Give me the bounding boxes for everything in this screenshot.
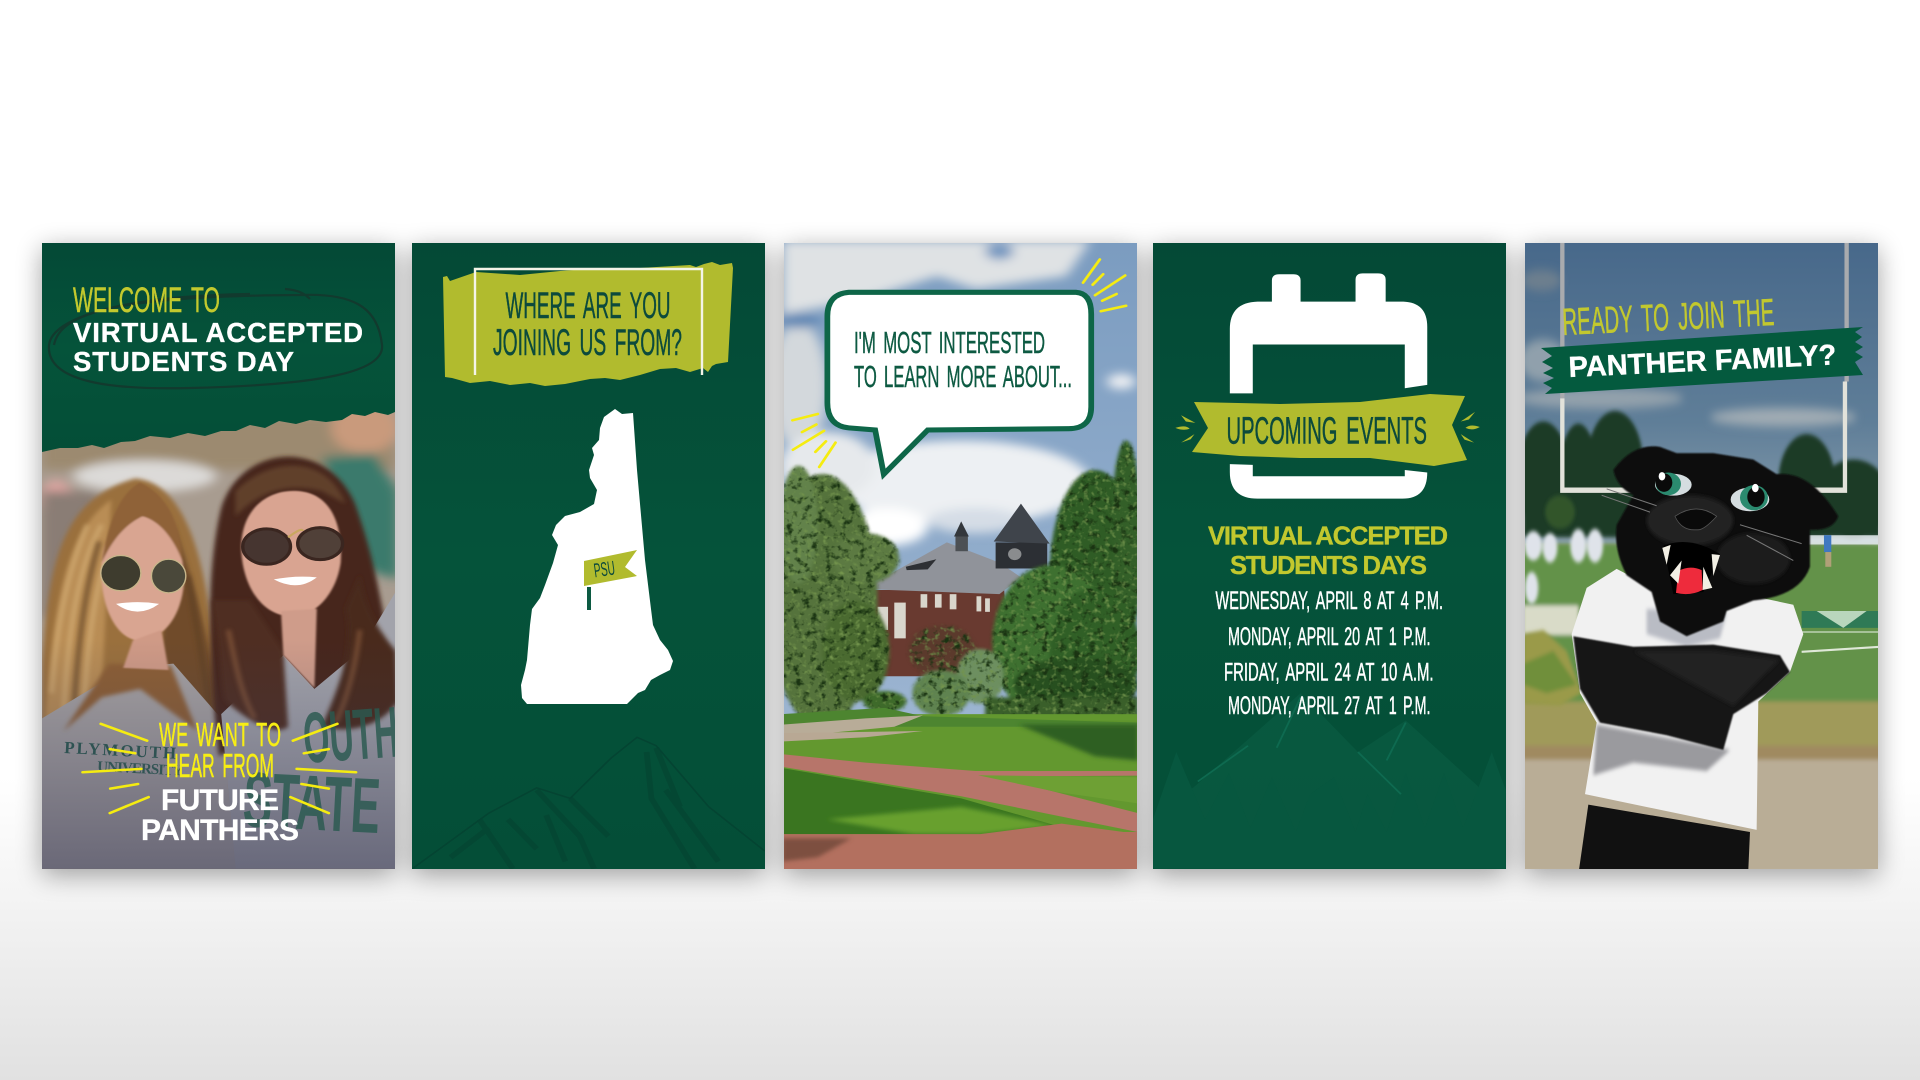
panel: panther family <box>1517 241 1890 873</box>
callout line: hear from: HEAR FROM <box>166 747 274 784</box>
event: april 24: FRIDAY, APRIL 24 AT 10 A.M. <box>1224 658 1434 686</box>
photo: campus <box>784 243 1137 714</box>
banner <box>443 262 733 386</box>
callout: we want to hear from: WE WANT TO <box>159 716 281 753</box>
players <box>1525 529 1603 604</box>
panel: where are you joining from <box>412 243 765 869</box>
callout: future: FUTURE <box>161 784 279 817</box>
panel: welcome story <box>40 243 401 869</box>
whiskers <box>1602 489 1802 560</box>
tree line <box>1517 411 1890 542</box>
event: april 8: WEDNESDAY, APRIL 8 AT 4 P.M. <box>1216 587 1443 615</box>
photo: mascot on football field <box>1517 241 1890 873</box>
heading: students day: STUDENTS DAY <box>73 346 294 377</box>
shrubs <box>1523 630 1582 706</box>
calendar icon <box>1230 273 1427 499</box>
banner: upcoming events: UPCOMING EVENTS <box>1226 410 1427 452</box>
callout: panthers: PANTHERS <box>141 814 299 847</box>
trees <box>768 440 1140 727</box>
banner: panther family: PANTHER FAMILY? <box>1568 339 1837 384</box>
map: New Hampshire <box>521 409 673 704</box>
left student <box>42 478 236 869</box>
lawns and brick paths <box>782 708 1138 870</box>
torn green header <box>42 243 395 452</box>
heading: virtual accepted: VIRTUAL ACCEPTED <box>73 317 363 348</box>
right student <box>210 457 398 869</box>
text: OUTH <box>301 693 401 779</box>
panel: upcoming events <box>1153 243 1506 869</box>
field <box>1520 544 1883 873</box>
subheading: virtual accepted: VIRTUAL ACCEPTED <box>1208 522 1448 550</box>
yellow rays <box>83 724 356 813</box>
sweater lettering: university: UNIVERSITY <box>97 759 184 780</box>
building <box>863 504 1050 676</box>
banner text: WHERE ARE YOU <box>506 285 670 326</box>
flag: PSU: PSU <box>593 558 616 582</box>
heading: welcome to: WELCOME TO <box>73 281 220 320</box>
bubble text line two: TO LEARN MORE ABOUT... <box>854 359 1072 394</box>
banner text line two: JOINING US FROM? <box>493 322 682 363</box>
subheading: students days: STUDENTS DAYS <box>1230 552 1427 580</box>
hand-drawn ellipse <box>49 289 382 388</box>
goal post <box>1562 243 1847 490</box>
banner: upcoming events <box>1192 394 1467 466</box>
mountains and pines <box>1153 693 1506 869</box>
mascot <box>1572 446 1838 870</box>
sweater lettering: left: PLYMOUTH <box>64 738 177 763</box>
speech bubble <box>827 292 1091 474</box>
event: april 20: MONDAY, APRIL 20 AT 1 P.M. <box>1228 623 1430 651</box>
sweater lettering: right: STATE <box>241 755 383 850</box>
sweater lettering: right <box>244 707 395 833</box>
photo: two students in sunglasses <box>40 403 398 869</box>
eyes <box>1655 474 1692 496</box>
event: april 27: MONDAY, APRIL 27 AT 1 P.M. <box>1228 692 1430 720</box>
panel: campus photo question <box>768 241 1140 872</box>
bubble text: I'M MOST INTERESTED <box>854 325 1045 360</box>
banner accents <box>1175 412 1480 443</box>
banner frame <box>475 269 702 375</box>
yellow rays <box>792 259 1126 467</box>
banner: panther family <box>1541 327 1863 394</box>
flag: PSU <box>584 550 637 610</box>
muzzle and mouth <box>1675 509 1717 530</box>
mountain outline <box>412 737 765 869</box>
